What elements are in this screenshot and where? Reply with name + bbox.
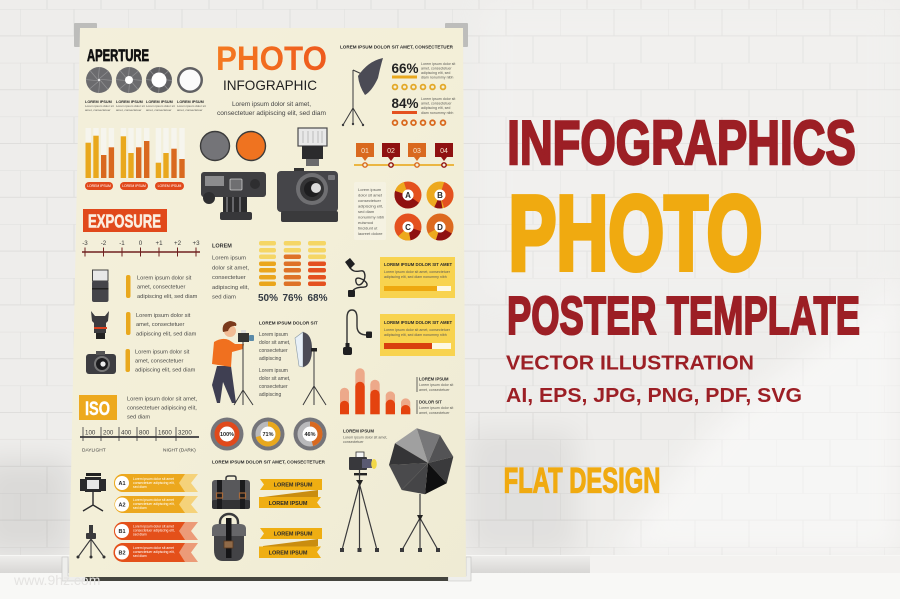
photographer text: dolor sit amet,	[259, 376, 290, 382]
stats heading: LOREM IPSUM DOLOR SIT AMET, CONSECTETUER	[340, 44, 454, 50]
exposure banner	[83, 209, 167, 232]
gauge 46%: 46%	[304, 432, 316, 438]
aperture labels: LOREM IPSUM	[146, 100, 173, 104]
icon: speedlight	[92, 270, 108, 302]
lorem text block: Lorem ipsum	[212, 256, 246, 262]
note block: Lorem ipsum	[358, 187, 382, 192]
note block	[354, 182, 386, 240]
ISO scale: 100	[85, 430, 96, 436]
illustration: camera on tall tripod	[340, 452, 379, 552]
camera tripod caption	[343, 428, 387, 444]
photographer text: adipiscing	[259, 392, 281, 398]
stat 84%: amet, consectetuer	[421, 102, 452, 106]
title block	[216, 40, 327, 117]
ribbon B2: sed diam	[133, 554, 147, 558]
exposure row 1 text	[126, 275, 198, 300]
aperture labels: Lorem ipsum dolor sit	[85, 104, 114, 108]
stat 66%: Lorem ipsum dolor sit	[421, 62, 455, 66]
stacked bars 50 76 68: 50%	[258, 293, 278, 304]
ribbon pair 2: LOREM IPSUM	[274, 532, 313, 538]
exposure row 1 text: Lorem ipsum dolor sit	[137, 276, 192, 282]
aperture labels: Lorem ipsum dolor sit	[177, 104, 206, 108]
ISO badge: ISO	[85, 399, 110, 420]
aperture labels: Lorem ipsum dolor sit	[146, 104, 175, 108]
ribbon pair 1	[259, 479, 322, 508]
timeline 01-04: 03	[413, 148, 421, 155]
chart legend	[417, 376, 453, 415]
intro text	[217, 101, 326, 117]
chart: rounded bars	[340, 368, 410, 414]
note block: tincidunt ut	[358, 226, 378, 230]
photographer text: Lorem ipsum	[259, 368, 288, 374]
panel: yellow card 1: adipiscing elit, sed diam nonummy nibh	[384, 275, 447, 279]
ISO scale: 3200	[178, 430, 192, 436]
chart legend: LOREM IPSUM	[419, 376, 449, 382]
illustration: big umbrella on stand	[389, 428, 453, 552]
ribbon B2: consectetuer adipiscing elit,	[133, 550, 175, 554]
ISO scale	[80, 427, 199, 454]
icon: small tripod	[76, 525, 106, 558]
ribbon A1: Lorem ipsum dolor sit amet	[133, 477, 174, 481]
icon: flash camera	[277, 128, 338, 222]
note block: adipiscing elit,	[358, 204, 383, 208]
chart legend: Lorem ipsum dolor sit	[419, 383, 453, 387]
label: flat design: FLAT DESIGN	[504, 460, 660, 500]
right column headline	[504, 108, 860, 501]
ISO text: consectetuer adipiscing elit,	[127, 406, 197, 412]
icon: LED light	[80, 473, 106, 511]
icon: camera	[86, 351, 116, 374]
heading: photo: PHOTO	[508, 174, 762, 292]
chart legend: amet, consectetuer	[419, 411, 450, 415]
subheading: vector illustration: VECTOR ILLUSTRATION	[506, 352, 754, 374]
photographer text: consectetuer	[259, 348, 288, 354]
donut charts A B C D	[398, 186, 450, 236]
lorem text block: sed diam	[212, 294, 236, 300]
timeline 01-04	[354, 143, 454, 167]
panel: yellow card 2	[380, 314, 455, 356]
aperture labels	[85, 100, 206, 112]
panel: yellow card 2: LOREM IPSUM DOLOR SIT AMET	[384, 320, 452, 325]
exposure row 2 text: Lorem ipsum dolor sit	[136, 313, 191, 319]
stat 66%: 66%	[392, 60, 419, 76]
poster clamps	[62, 23, 471, 581]
aperture icons	[86, 67, 203, 93]
chart legend: DOLOR SIT	[419, 400, 442, 404]
aperture labels: amet, consectetuer	[116, 108, 142, 112]
donut C: C	[405, 223, 411, 232]
chart pills	[85, 182, 184, 190]
ISO text	[127, 396, 198, 420]
ribbon B2: B2	[118, 550, 126, 556]
photographer text: consectetuer	[259, 384, 288, 390]
timeline 01-04: 01	[361, 148, 369, 155]
icon: camera back	[201, 172, 266, 220]
ribbon B2: Lorem ipsum dolor sit amet	[133, 546, 174, 550]
photographer text: dolor sit amet,	[259, 340, 290, 346]
donut B: B	[437, 191, 443, 200]
ribbon pair 1: LOREM IPSUM	[269, 501, 308, 507]
panel: exposure	[82, 209, 200, 374]
aperture labels: LOREM IPSUM	[116, 100, 143, 104]
exposure scale: 0	[139, 240, 143, 247]
icon: softbox on stand	[295, 332, 326, 405]
camera tripod caption: Lorem ipsum dolor sit amet,	[343, 436, 387, 440]
panel: yellow card 1: Lorem ipsum dolor sit amet, consectetuer	[384, 270, 451, 274]
exposure row 3 text: amet, consectetuer	[135, 358, 183, 364]
chart pills: LOREM IPSUM	[122, 184, 146, 188]
aperture labels: Lorem ipsum dolor sit	[116, 104, 145, 108]
aperture labels: amet, consectetuer	[146, 108, 172, 112]
exposure row 2 text	[126, 312, 197, 338]
timeline 01-04: 02	[387, 148, 395, 155]
stacked bars 50 76 68: 76%	[282, 293, 303, 304]
exposure row 2 text: amet, consectetuer	[136, 322, 184, 328]
ribbon pair 2: LOREM IPSUM	[269, 550, 308, 556]
ribbon A1: A1	[118, 481, 126, 487]
timeline 01-04: 04	[440, 148, 448, 155]
gauges 100 71 46	[210, 418, 326, 464]
camera tripod caption: consectetuer	[343, 440, 364, 444]
panel: yellow card 1	[380, 257, 455, 298]
note block: euismod	[358, 220, 373, 225]
stat 84%: Lorem ipsum dolor sit	[421, 97, 455, 101]
note block: dolor sit amet	[358, 192, 383, 198]
stat 66%: amet, consectetuer	[421, 66, 452, 70]
chart legend: Lorem ipsum dolor sit	[419, 406, 453, 410]
ISO scale: NIGHT (DARK)	[163, 448, 196, 454]
panel: ISO	[79, 395, 199, 454]
note block: nonummy nibh	[358, 214, 384, 220]
intro text: consectetuer adipiscing elit, sed diam	[217, 110, 326, 117]
chart pills: LOREM IPSUM	[158, 184, 182, 188]
icon: umbrella on stand	[342, 58, 383, 126]
ribbon A2: consectetuer adipiscing elit,	[133, 502, 175, 506]
chart legend: amet, consectetuer	[419, 388, 450, 392]
ISO scale: 400	[121, 430, 132, 436]
ribbon B2	[114, 543, 198, 562]
stat 84%: 84%	[392, 95, 419, 111]
camera tripod caption: LOREM IPSUM	[343, 428, 374, 434]
photographer text: adipiscing	[259, 356, 281, 362]
title: photo: PHOTO	[216, 40, 327, 78]
donut A: A	[405, 191, 411, 200]
photographer text: LOREM IPSUM DOLOR SIT	[259, 320, 318, 326]
stat 66%: adipiscing elit, sed	[421, 71, 450, 75]
watermark: www.9hz.com	[13, 572, 100, 588]
icons: lens filters	[200, 132, 266, 160]
ISO scale: DAYLIGHT	[82, 448, 106, 454]
ribbon A2: Lorem ipsum dolor sit amet	[133, 498, 174, 502]
ribbon A2	[114, 496, 198, 513]
aperture labels: LOREM IPSUM	[85, 100, 112, 104]
ribbon A1: sed diam	[133, 485, 147, 489]
ribbon pair 1: LOREM IPSUM	[274, 482, 313, 488]
ribbon A1	[114, 474, 198, 492]
stat 66%: diam nonummy nibh	[421, 76, 453, 80]
ribbon B1: B1	[118, 529, 126, 535]
photographer text	[259, 320, 318, 398]
aperture labels: LOREM IPSUM	[177, 100, 204, 104]
exposure row 3 text	[126, 349, 196, 374]
exposure scale: -1	[119, 240, 125, 247]
lorem text block: LOREM	[212, 244, 232, 250]
ribbon B1: Lorem ipsum dolor sit amet	[133, 524, 174, 528]
donut D: D	[437, 223, 443, 232]
ISO scale: 800	[139, 430, 150, 436]
ribbon B1	[114, 522, 198, 540]
exposure scale: -3	[82, 240, 88, 247]
exposure row 1 text: adipiscing elit, sed diam	[137, 294, 198, 300]
note block: laoreet dolore	[358, 231, 383, 236]
stacked bars 50 76 68	[258, 241, 328, 304]
lorem text block: adipiscing elit,	[212, 285, 249, 291]
note block: sed diam	[358, 209, 375, 214]
panel: stats	[340, 44, 455, 126]
exposure banner: EXPOSURE	[88, 210, 161, 232]
exposure scale: +3	[192, 240, 200, 247]
exposure row 1 text: amet, consectetuer	[137, 284, 185, 290]
lorem text block: consectetuer	[212, 275, 246, 281]
chart pills: LOREM IPSUM	[87, 184, 111, 188]
intro text: Lorem ipsum dolor sit amet,	[232, 101, 311, 108]
illustration: photographer with tripod	[212, 321, 254, 405]
lorem text block	[212, 244, 249, 300]
ISO scale: 200	[103, 430, 114, 436]
ribbon A2: sed diam	[133, 506, 147, 510]
icon: lens	[91, 311, 109, 339]
panel: aperture	[85, 47, 206, 112]
bar charts: three groups	[85, 128, 185, 190]
panel: yellow card 2: adipiscing elit, sed diam nonummy nibh	[384, 333, 447, 337]
exposure row 3 text: adipiscing elit, sed diam	[135, 368, 196, 374]
panel: yellow card 2: Lorem ipsum dolor sit amet, consectetuer	[384, 328, 451, 332]
gauge 100%: 100%	[220, 432, 234, 438]
exposure row 2 text: adipiscing elit, sed diam	[136, 332, 197, 338]
ribbon B1: sed diam	[133, 532, 147, 536]
ribbon B1: consectetuer adipiscing elit,	[133, 528, 175, 532]
panel: yellow card 1: LOREM IPSUM DOLOR SIT AMET	[384, 262, 452, 267]
heading: aperture: APERTURE	[87, 47, 149, 65]
subtitle: INFOGRAPHIC	[223, 77, 317, 93]
subheading: file formats: AI, EPS, JPG, PNG, PDF, SVG	[506, 384, 802, 407]
icon: camera backpack	[212, 514, 246, 561]
icon: camera briefcase	[212, 476, 250, 509]
gauges caption: LOREM IPSUM DOLOR SIT AMET, CONSECTETUER	[212, 460, 326, 464]
photographer text: Lorem ipsum	[259, 332, 288, 338]
stat 84%	[392, 95, 455, 125]
ribbon A1: consectetuer adipiscing elit,	[133, 481, 175, 485]
lorem text block: dolor sit amet,	[212, 266, 249, 272]
ribbon pair 2	[259, 528, 322, 558]
exposure row 3 text: Lorem ipsum dolor sit	[135, 350, 190, 356]
aperture labels: amet, consectetuer	[177, 108, 203, 112]
icon: coiled cable	[345, 258, 367, 297]
poster	[69, 28, 466, 577]
exposure scale: -2	[101, 240, 107, 247]
ISO scale: 1600	[158, 430, 172, 436]
aperture labels: amet, consectetuer	[85, 108, 111, 112]
ISO text: sed diam	[127, 414, 150, 420]
stat 84%: diam nonummy nibh	[421, 111, 453, 115]
exposure scale: +1	[155, 240, 163, 247]
exposure scale	[82, 240, 200, 256]
ISO text: Lorem ipsum dolor sit amet,	[127, 396, 198, 402]
stat 66%	[392, 60, 455, 89]
note block: consectetuer	[358, 198, 382, 203]
ribbon A2: A2	[118, 502, 126, 508]
stacked bars 50 76 68: 68%	[307, 293, 328, 304]
stat 84%: adipiscing elit, sed	[421, 106, 450, 110]
gauge 71%: 71%	[262, 432, 274, 438]
icon: cable with plug	[343, 310, 372, 355]
exposure scale: +2	[174, 240, 182, 247]
